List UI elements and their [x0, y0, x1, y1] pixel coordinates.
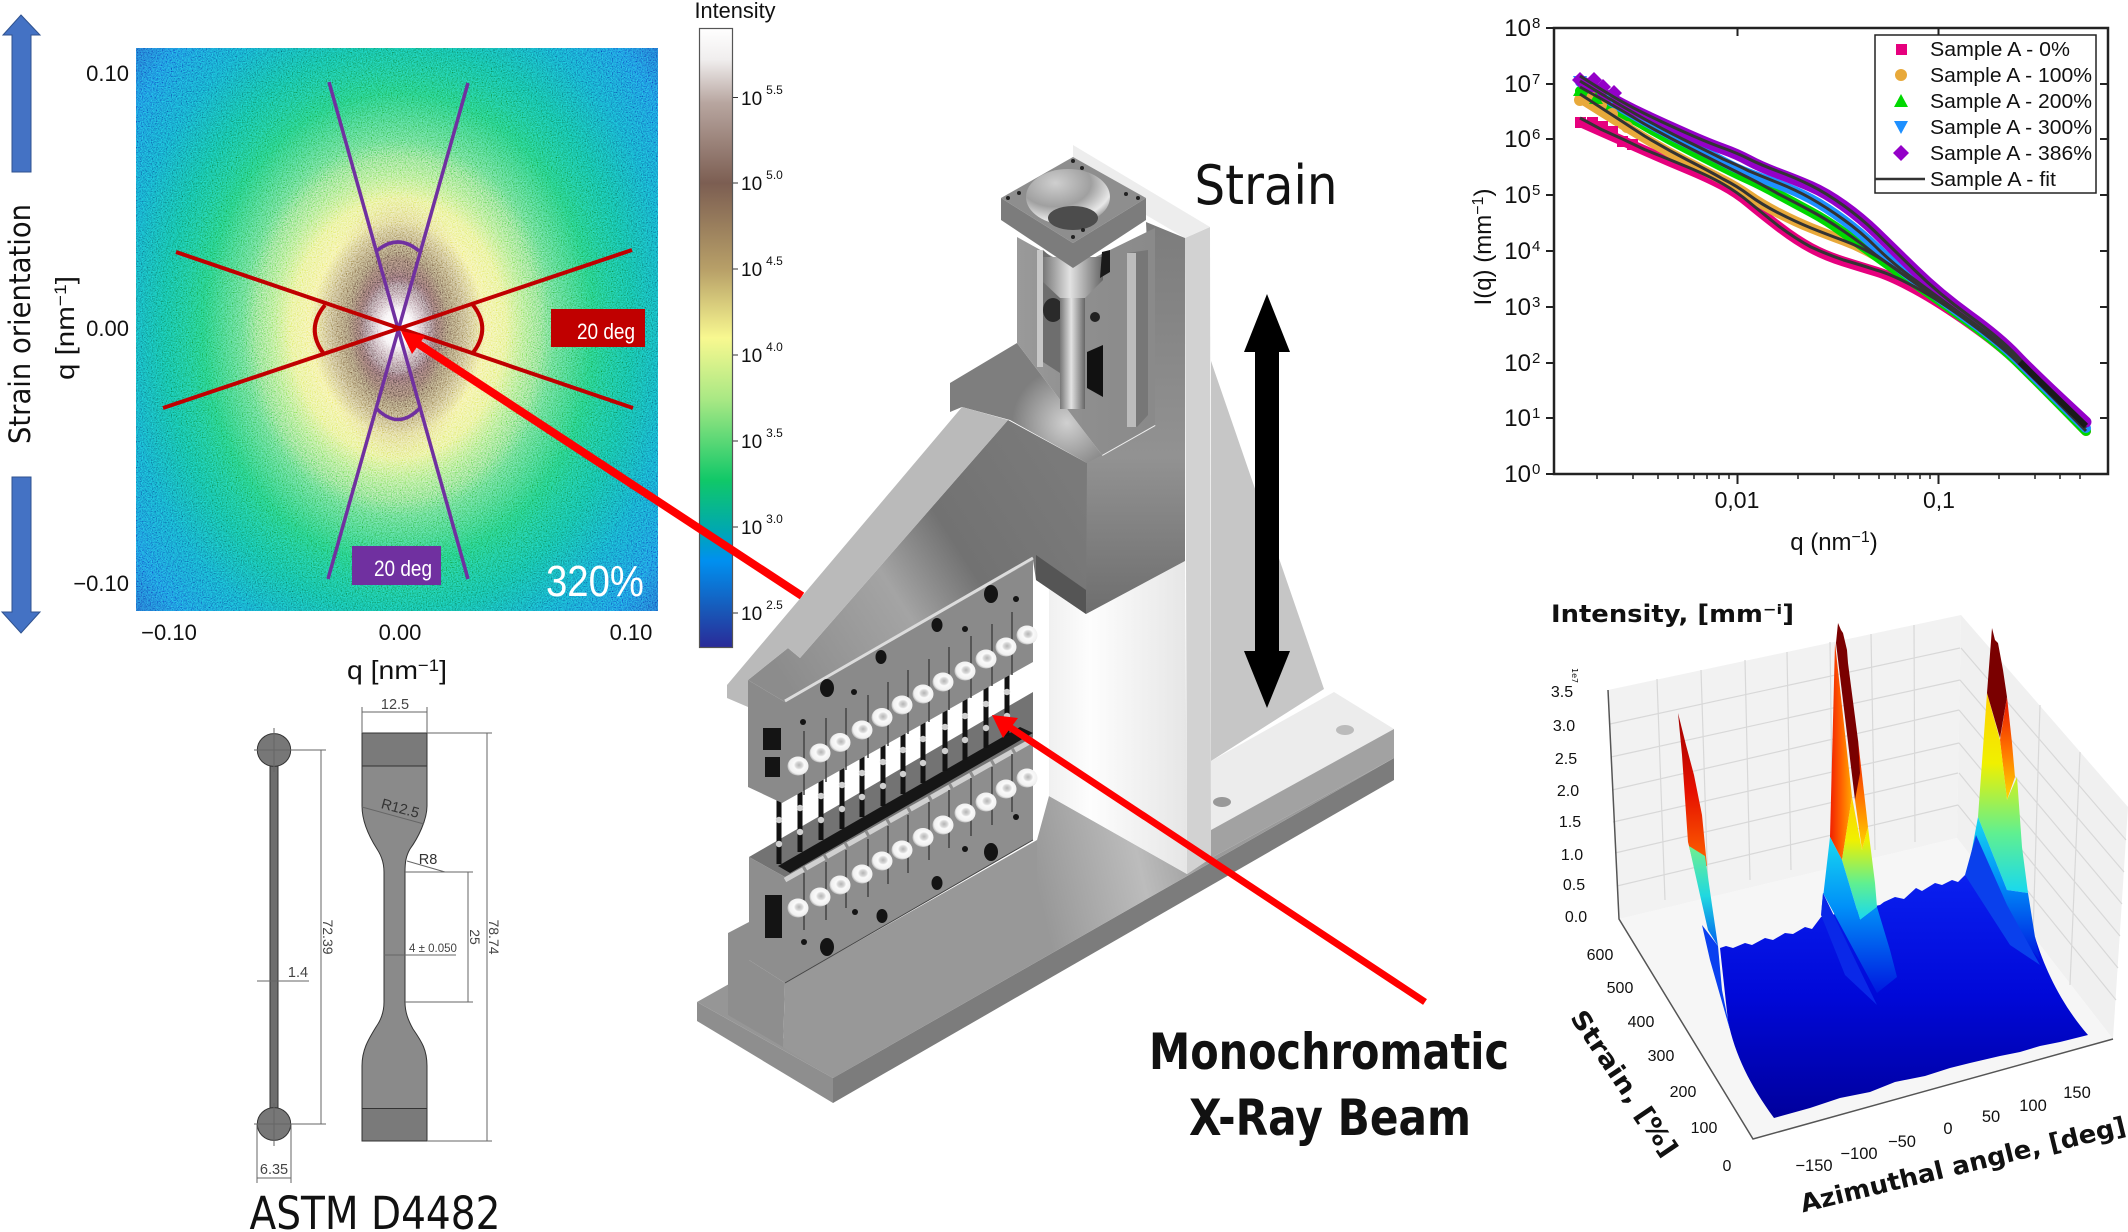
- callout: red 20 deg: 20 deg: [577, 319, 635, 344]
- y tick labels: 10: [1504, 71, 1531, 98]
- azimuth axis tick labels: −50: [1888, 1133, 1916, 1151]
- colorbar tick labels: 10: [741, 432, 762, 453]
- y axis label: ): [1470, 189, 1497, 197]
- strain axis title: Strain, [%]: [1564, 1005, 1684, 1162]
- heatmap axis x ticks: 0.00: [379, 620, 421, 645]
- x axis label: q (nm: [1790, 529, 1852, 556]
- z axis tick labels: 0.0: [1565, 909, 1587, 926]
- legend: Sample A - 300%: [1930, 117, 2092, 139]
- y axis label: I(q) (mm: [1470, 215, 1497, 305]
- y tick exponents: 5: [1532, 182, 1540, 199]
- heatmap x axis label: ]: [439, 655, 447, 685]
- strain value label: 320%: [546, 557, 644, 606]
- base plate: [697, 758, 1394, 1103]
- specimen front view: 12.5: [381, 697, 409, 713]
- z axis tick labels: 2.0: [1557, 783, 1579, 800]
- colorbar tick labels: 5.0: [766, 168, 783, 182]
- y tick exponents: 6: [1532, 126, 1540, 143]
- strain axis tick labels: 100: [1691, 1120, 1717, 1137]
- strain axis tick labels: 500: [1607, 980, 1633, 997]
- azimuth axis tick labels: 150: [2063, 1084, 2091, 1102]
- y axis label: −1: [1470, 196, 1487, 215]
- colorbar tick labels: 3.5: [766, 426, 783, 440]
- surface base: [1720, 875, 2088, 1118]
- specimen front view: 25: [467, 929, 483, 945]
- label: monochromatic x-ray beam: X-Ray Beam: [1189, 1089, 1471, 1147]
- upright column: [1049, 145, 1324, 874]
- y tick labels: 10: [1504, 15, 1531, 42]
- colorbar tick labels: 10: [741, 89, 762, 110]
- colorbar tick labels: [741, 83, 783, 625]
- arrow: strain direction double arrow: [1244, 294, 1290, 708]
- axes frame and ticks: [1546, 28, 2108, 484]
- fit lines: [1580, 76, 2086, 431]
- strain axis tick labels: [1587, 947, 1732, 1175]
- plot title: Intensity, [mm⁻ⁱ]: [1551, 600, 1794, 628]
- azimuth axis title: Azimuthal angle, [deg]: [1797, 1111, 2128, 1218]
- strain axis tick labels: 300: [1648, 1048, 1674, 1065]
- specimen side view: 72.39: [320, 919, 336, 955]
- specimen front view: R12.5: [379, 796, 421, 822]
- azimuth axis tick labels: −150: [1795, 1157, 1833, 1175]
- x axis label: ): [1870, 529, 1878, 556]
- specimen side view: 1.4: [288, 965, 308, 981]
- label: monochromatic x-ray beam: [1149, 1023, 1509, 1147]
- y tick labels: 10: [1504, 238, 1531, 265]
- z axis tick labels: 1.0: [1561, 847, 1583, 864]
- arrow: strain orientation down: [2, 477, 40, 633]
- heading: strain: Strain: [1194, 154, 1338, 217]
- strain axis tick labels: 400: [1628, 1014, 1654, 1031]
- arrow: x-ray beam: [992, 715, 1425, 1002]
- specimen side view: 6.35: [260, 1162, 288, 1178]
- lower grip top surface: [749, 692, 1033, 877]
- x axis label: −1: [1852, 529, 1870, 546]
- z axis tick labels: 3.5: [1551, 684, 1573, 701]
- purple sector lines: [328, 82, 468, 579]
- y tick exponents: 1: [1532, 405, 1540, 422]
- heatmap axis y ticks: 0.10: [86, 61, 129, 86]
- y tick exponents: 3: [1532, 294, 1540, 311]
- y tick labels: [1504, 15, 1531, 488]
- legend: Sample A - 200%: [1930, 91, 2092, 113]
- heatmap axis x ticks: 0.10: [610, 620, 652, 645]
- z axis tick labels: 3.0: [1553, 718, 1575, 735]
- colorbar tick labels: 5.5: [766, 83, 783, 97]
- y tick exponents: 2: [1532, 350, 1540, 367]
- data point markers: [1572, 72, 1638, 150]
- z axis tick labels: 2.5: [1555, 751, 1577, 768]
- y tick exponents: 4: [1532, 238, 1540, 255]
- heatmap axis x ticks: −0.10: [141, 620, 197, 645]
- colorbar tick labels: 4.0: [766, 340, 783, 354]
- actuator tower: [1001, 157, 1155, 455]
- 3D box walls and floor: [1608, 615, 2128, 1139]
- y tick labels: 10: [1504, 350, 1531, 377]
- axes: [1608, 690, 2113, 1139]
- y tick labels: 10: [1504, 126, 1531, 153]
- colorbar tick labels: 10: [741, 604, 762, 625]
- colorbar ticks: [733, 98, 738, 613]
- peak 1: [1678, 713, 1730, 1030]
- panel: ASTM D4482 specimen drawing: [250, 697, 502, 1232]
- callout: purple 20 deg: [352, 546, 441, 585]
- y tick labels: 10: [1504, 182, 1531, 209]
- heatmap axis y ticks: [73, 61, 129, 596]
- panel: 3D surface plot: [1551, 600, 2128, 1218]
- colorbar tick labels: 10: [741, 174, 762, 195]
- azimuth axis tick labels: 50: [1982, 1108, 2000, 1126]
- y tick exponents: [1532, 15, 1540, 478]
- colorbar tick labels: 3.0: [766, 512, 783, 526]
- z axis tick labels: 0.5: [1563, 877, 1585, 894]
- heatmap y axis label: ]: [50, 276, 80, 284]
- specimens held between grips: [776, 662, 1033, 873]
- peak 2: [1821, 623, 1897, 1005]
- colorbar tick labels: 4.5: [766, 254, 783, 268]
- colorbar tick labels: 10: [741, 260, 762, 281]
- red sector lines: [163, 250, 633, 408]
- strain axis tick labels: 0: [1723, 1158, 1732, 1175]
- peak 3: [1965, 628, 2040, 965]
- callout: purple 20 deg: 20 deg: [374, 556, 432, 581]
- crosshead block: [950, 222, 1185, 614]
- azimuth axis tick labels: −100: [1840, 1145, 1878, 1163]
- x tick labels: 0,01: [1715, 487, 1759, 513]
- wedge arm: [727, 407, 1087, 707]
- heatmap y axis label: −1: [51, 284, 70, 306]
- heatmap axis x ticks: [141, 620, 652, 645]
- arrow: beam to scattering pattern: [401, 331, 802, 596]
- label: monochromatic x-ray beam: Monochromatic: [1149, 1023, 1509, 1081]
- z axis tick labels: 1.5: [1559, 814, 1581, 831]
- upper grip plate: [748, 558, 1038, 803]
- z axis scale factor: 1e7: [1570, 668, 1579, 683]
- strain axis tick labels: 200: [1670, 1084, 1696, 1101]
- heatmap x axis label: −1: [418, 656, 439, 675]
- y tick labels: 10: [1504, 294, 1531, 321]
- panel: tensile test machine: [697, 145, 1394, 1103]
- specimen side view: [254, 728, 336, 1183]
- colorbar tick labels: 10: [741, 346, 762, 367]
- y tick labels: 10: [1504, 461, 1531, 488]
- legend: Sample A - 100%: [1930, 65, 2092, 87]
- lower pedestal: [728, 840, 1037, 1078]
- specimen front view: [362, 697, 502, 1141]
- legend: Sample A - 0%: [1930, 39, 2070, 61]
- heatmap y axis label: q [nm: [50, 315, 80, 380]
- legend: [1875, 35, 2096, 193]
- colorbar tick labels: 2.5: [766, 598, 783, 612]
- z axis tick labels: [1551, 684, 1587, 926]
- label: strain orientation: Strain orientation: [3, 204, 37, 444]
- y tick exponents: 0: [1532, 461, 1540, 478]
- foot with mounting holes: [1211, 692, 1394, 858]
- heatmap axis y ticks: −0.10: [73, 571, 129, 596]
- colorbar: [694, 0, 783, 648]
- series curves: [1580, 80, 2086, 431]
- y tick exponents: 7: [1532, 71, 1540, 88]
- y tick exponents: 8: [1532, 15, 1540, 32]
- legend: Sample A - fit: [1930, 169, 2056, 191]
- heatmap axis y ticks: 0.00: [86, 316, 129, 341]
- specimen front view: 4 ± 0.050: [409, 943, 457, 955]
- panel: SAXS curves chart: [1470, 15, 2108, 556]
- arrow: strain orientation up: [3, 15, 40, 172]
- azimuth axis tick labels: 0: [1943, 1120, 1953, 1138]
- x tick labels: 0,1: [1923, 487, 1955, 513]
- strain axis tick labels: 600: [1587, 947, 1613, 964]
- lower grip plate: [749, 737, 1038, 983]
- legend: Sample A - 386%: [1930, 143, 2092, 165]
- specimen front view: 78.74: [486, 919, 502, 955]
- azimuth axis tick labels: [1795, 1084, 2091, 1175]
- y tick labels: 10: [1504, 405, 1531, 432]
- heatmap x axis label: q [nm: [347, 655, 412, 685]
- colorbar tick labels: 10: [741, 518, 762, 539]
- azimuth axis tick labels: 100: [2019, 1097, 2047, 1115]
- x tick labels: [1715, 487, 1955, 513]
- specimen front view: R8: [419, 852, 437, 868]
- panel: scattering heatmap: [136, 48, 658, 611]
- callout: red 20 deg: [551, 309, 645, 347]
